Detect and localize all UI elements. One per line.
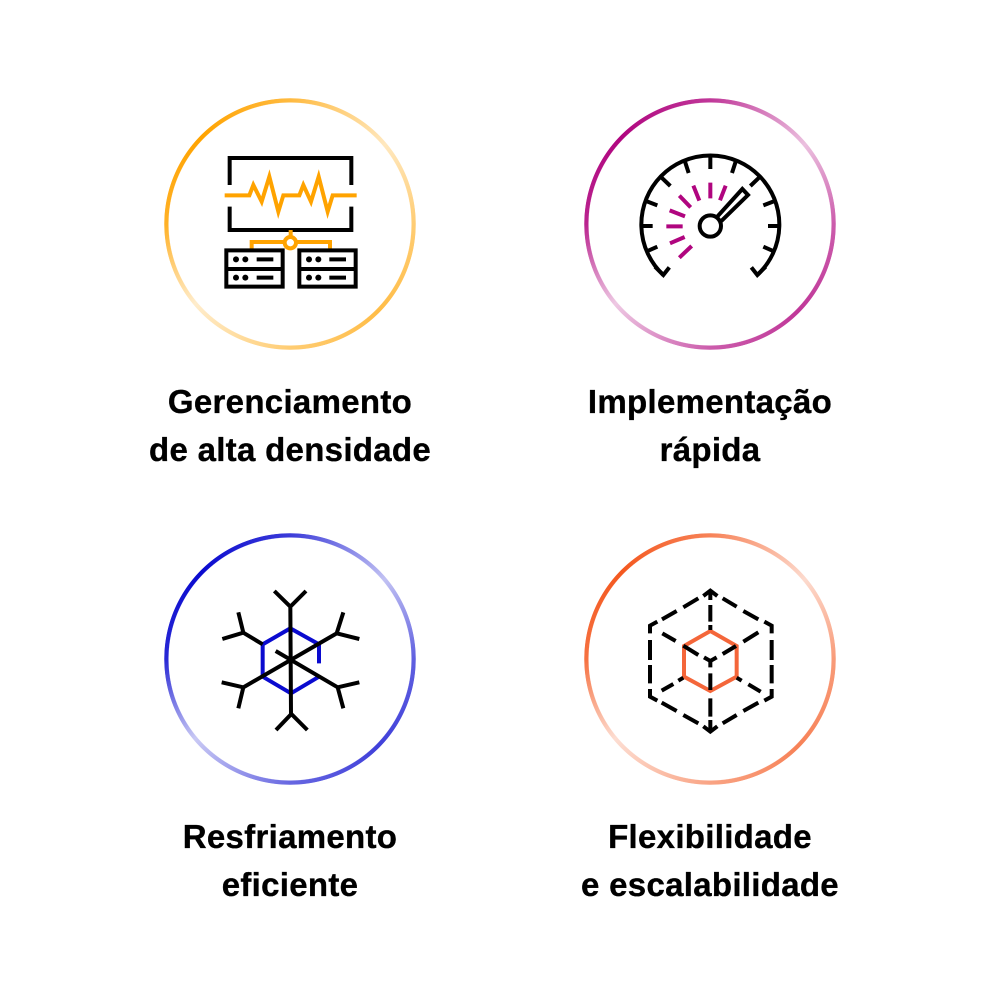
heading [149, 383, 431, 468]
ring: magenta gradient [584, 98, 836, 350]
heading: Resfriamento [183, 818, 397, 855]
heading: Implementação [588, 383, 832, 420]
heading [581, 818, 839, 903]
heading: rápida [660, 431, 760, 468]
heading: e escalabilidade [581, 866, 839, 903]
ring: coral gradient [584, 533, 836, 785]
heading: eficiente [222, 866, 358, 903]
panel: flexibility and scalability [581, 533, 839, 903]
heading: Flexibilidade [608, 818, 812, 855]
heading: Gerenciamento [168, 383, 412, 420]
heading [183, 818, 397, 903]
icon: monitor and servers [224, 156, 358, 289]
panel: efficient cooling [164, 533, 416, 903]
ring: orange gradient [164, 98, 416, 350]
heading [588, 383, 832, 468]
heading: de alta densidade [149, 431, 431, 468]
icon: dashed cube [648, 588, 774, 734]
icon: speedometer [639, 154, 782, 278]
panel: fast deployment [584, 98, 836, 468]
ring: blue gradient [164, 533, 416, 785]
icon: snowflake [221, 590, 360, 732]
panel: high density management [149, 98, 431, 468]
